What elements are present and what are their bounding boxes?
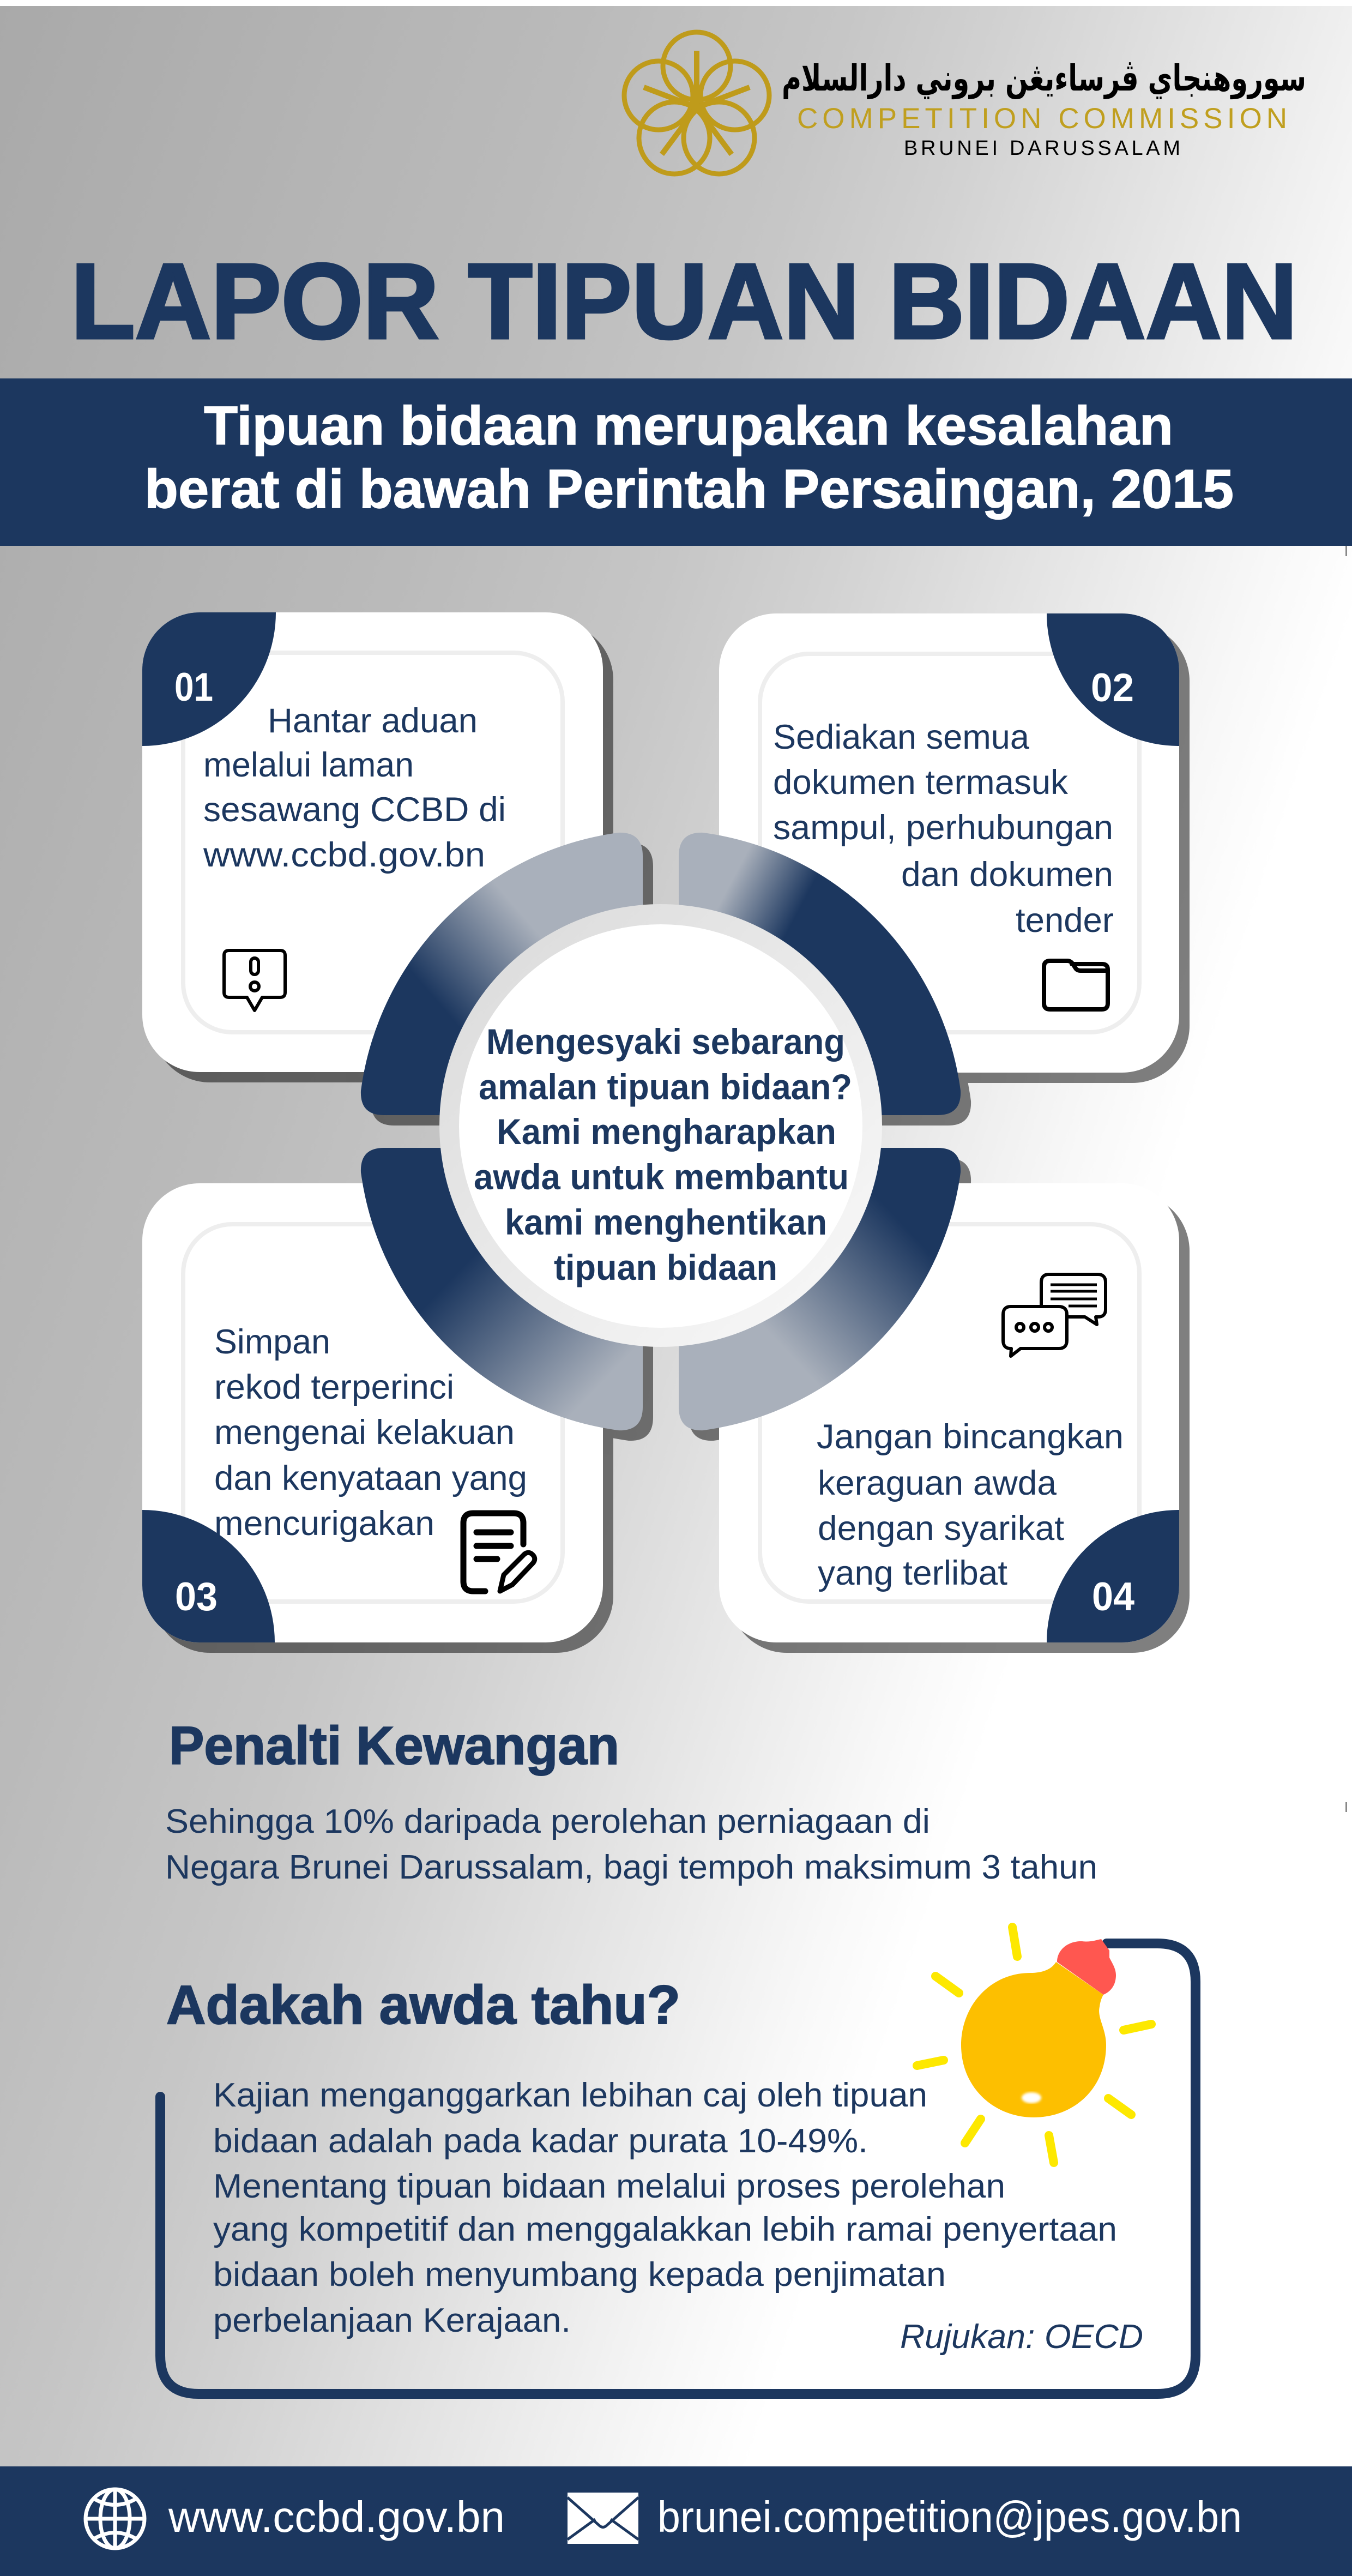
step 04 number corner: 04 bbox=[1092, 1575, 1134, 1619]
icon: light bulb bbox=[917, 1927, 1151, 2163]
banner bbox=[0, 378, 1352, 546]
step 03 text: mencurigakan bbox=[214, 1504, 434, 1543]
heading: Adakah awda tahu?: Adakah awda tahu? bbox=[166, 1975, 680, 2036]
step 02 text: dokumen termasuk bbox=[773, 763, 1069, 802]
step 04 text: dengan syarikat bbox=[818, 1509, 1064, 1548]
ring segment: bottom right bbox=[679, 1148, 961, 1430]
ring segment: top right bbox=[679, 833, 961, 1115]
step 02 text bbox=[773, 718, 1114, 940]
step 02 text: dan dokumen bbox=[901, 856, 1113, 894]
did you know text bbox=[213, 2077, 1117, 2339]
logo: Competition Commission Brunei Darussalam bbox=[624, 32, 1306, 174]
centre message text: kami menghentikan bbox=[505, 1202, 827, 1242]
centre message text: awda untuk membantu bbox=[474, 1157, 849, 1197]
panel: step 01 card bbox=[142, 612, 603, 1072]
ring segment: bottom left bbox=[361, 1148, 643, 1430]
centre circle with message bbox=[439, 904, 882, 1347]
step 03 text: dan kenyataan yang bbox=[214, 1459, 527, 1497]
logo name: COMPETITION COMMISSION bbox=[797, 103, 1287, 135]
step 01 text: Hantar aduan bbox=[268, 702, 478, 740]
did you know frame bbox=[160, 1943, 1196, 2394]
step 03 text: mengenai kelakuan bbox=[214, 1413, 515, 1452]
centre message text bbox=[474, 1021, 852, 1287]
website: www.ccbd.gov.bn bbox=[168, 2493, 505, 2541]
did you know text: yang kompetitif dan menggalakkan lebih ramai penyertaan bbox=[213, 2211, 1117, 2248]
centre message text: amalan tipuan bidaan? bbox=[479, 1067, 852, 1107]
step 03 text: rekod terperinci bbox=[214, 1368, 454, 1406]
icon: envelope bbox=[568, 2493, 638, 2544]
panel: step 02 card bbox=[719, 613, 1179, 1073]
title: LAPOR TIPUAN BIDAAN bbox=[71, 242, 1297, 361]
panel: step 03 card bbox=[142, 1183, 603, 1642]
step 03 number corner bbox=[142, 1510, 275, 1642]
penalty text: Negara Brunei Darussalam, bagi tempoh maksimum 3 tahun bbox=[165, 1849, 1097, 1886]
step 04 number corner bbox=[1047, 1510, 1179, 1642]
banner text line 1: Tipuan bidaan merupakan kesalahan bbox=[204, 395, 1173, 456]
penalty text bbox=[165, 1803, 1097, 1886]
step 04 text bbox=[817, 1418, 1124, 1592]
centre message text: Kami mengharapkan bbox=[497, 1111, 836, 1152]
email: brunei.competition@jpes.gov.bn bbox=[657, 2493, 1242, 2541]
ring segment: top left bbox=[361, 833, 643, 1115]
icon: chat bubbles bbox=[1003, 1274, 1106, 1356]
step 01 text: sesawang CCBD di bbox=[203, 791, 506, 829]
logo emblem bbox=[624, 32, 769, 174]
step 01 text: melalui laman bbox=[203, 746, 414, 784]
step 04 text: yang terlibat bbox=[818, 1554, 1007, 1592]
centre message text: Mengesyaki sebarang bbox=[486, 1021, 845, 1062]
did you know text: bidaan adalah pada kadar purata 10-49%. bbox=[213, 2122, 868, 2160]
step 02 number corner bbox=[1047, 613, 1179, 746]
step 02 text: tender bbox=[1016, 901, 1114, 940]
step 02 text: sampul, perhubungan bbox=[773, 809, 1113, 847]
icon: globe bbox=[86, 2489, 144, 2548]
footer bar bbox=[0, 2466, 1352, 2576]
did you know text: Menentang tipuan bidaan melalui proses perolehan bbox=[213, 2168, 1005, 2205]
logo country: BRUNEI DARUSSALAM bbox=[904, 137, 1180, 160]
penalty text: Sehingga 10% daripada perolehan perniagaan di bbox=[165, 1803, 930, 1840]
drop shadows of cards and ring segments bbox=[153, 623, 1190, 1653]
step 01 text bbox=[203, 702, 506, 874]
step 01 text: www.ccbd.gov.bn bbox=[203, 836, 485, 874]
icon: folder bbox=[1044, 961, 1108, 1009]
heading: Penalti Kewangan: Penalti Kewangan bbox=[169, 1716, 619, 1775]
did you know text: Kajian menganggarkan lebihan caj oleh tipuan bbox=[213, 2077, 927, 2114]
did you know text: perbelanjaan Kerajaan. bbox=[213, 2302, 571, 2339]
banner text line 2: berat di bawah Perintah Persaingan, 2015 bbox=[144, 459, 1234, 520]
centre message text: tipuan bidaan bbox=[554, 1247, 777, 1287]
step 03 text: Simpan bbox=[214, 1323, 330, 1361]
source note: Rujukan: OECD bbox=[900, 2318, 1143, 2356]
step 02 number corner: 02 bbox=[1091, 666, 1134, 710]
step 04 text: keraguan awda bbox=[818, 1464, 1057, 1502]
icon: document with pencil bbox=[463, 1513, 535, 1591]
step 01 number corner bbox=[142, 612, 276, 746]
step 01 number corner: 01 bbox=[174, 665, 213, 709]
did you know text: bidaan boleh menyumbang kepada penjimatan bbox=[213, 2256, 946, 2294]
step 02 text: Sediakan semua bbox=[773, 718, 1030, 756]
step 04 text: Jangan bincangkan bbox=[817, 1418, 1124, 1456]
panel: step 04 card bbox=[719, 1183, 1179, 1642]
step 03 number corner: 03 bbox=[175, 1575, 218, 1619]
step 03 text bbox=[214, 1323, 527, 1543]
icon: alert speech bubble bbox=[224, 950, 285, 1010]
